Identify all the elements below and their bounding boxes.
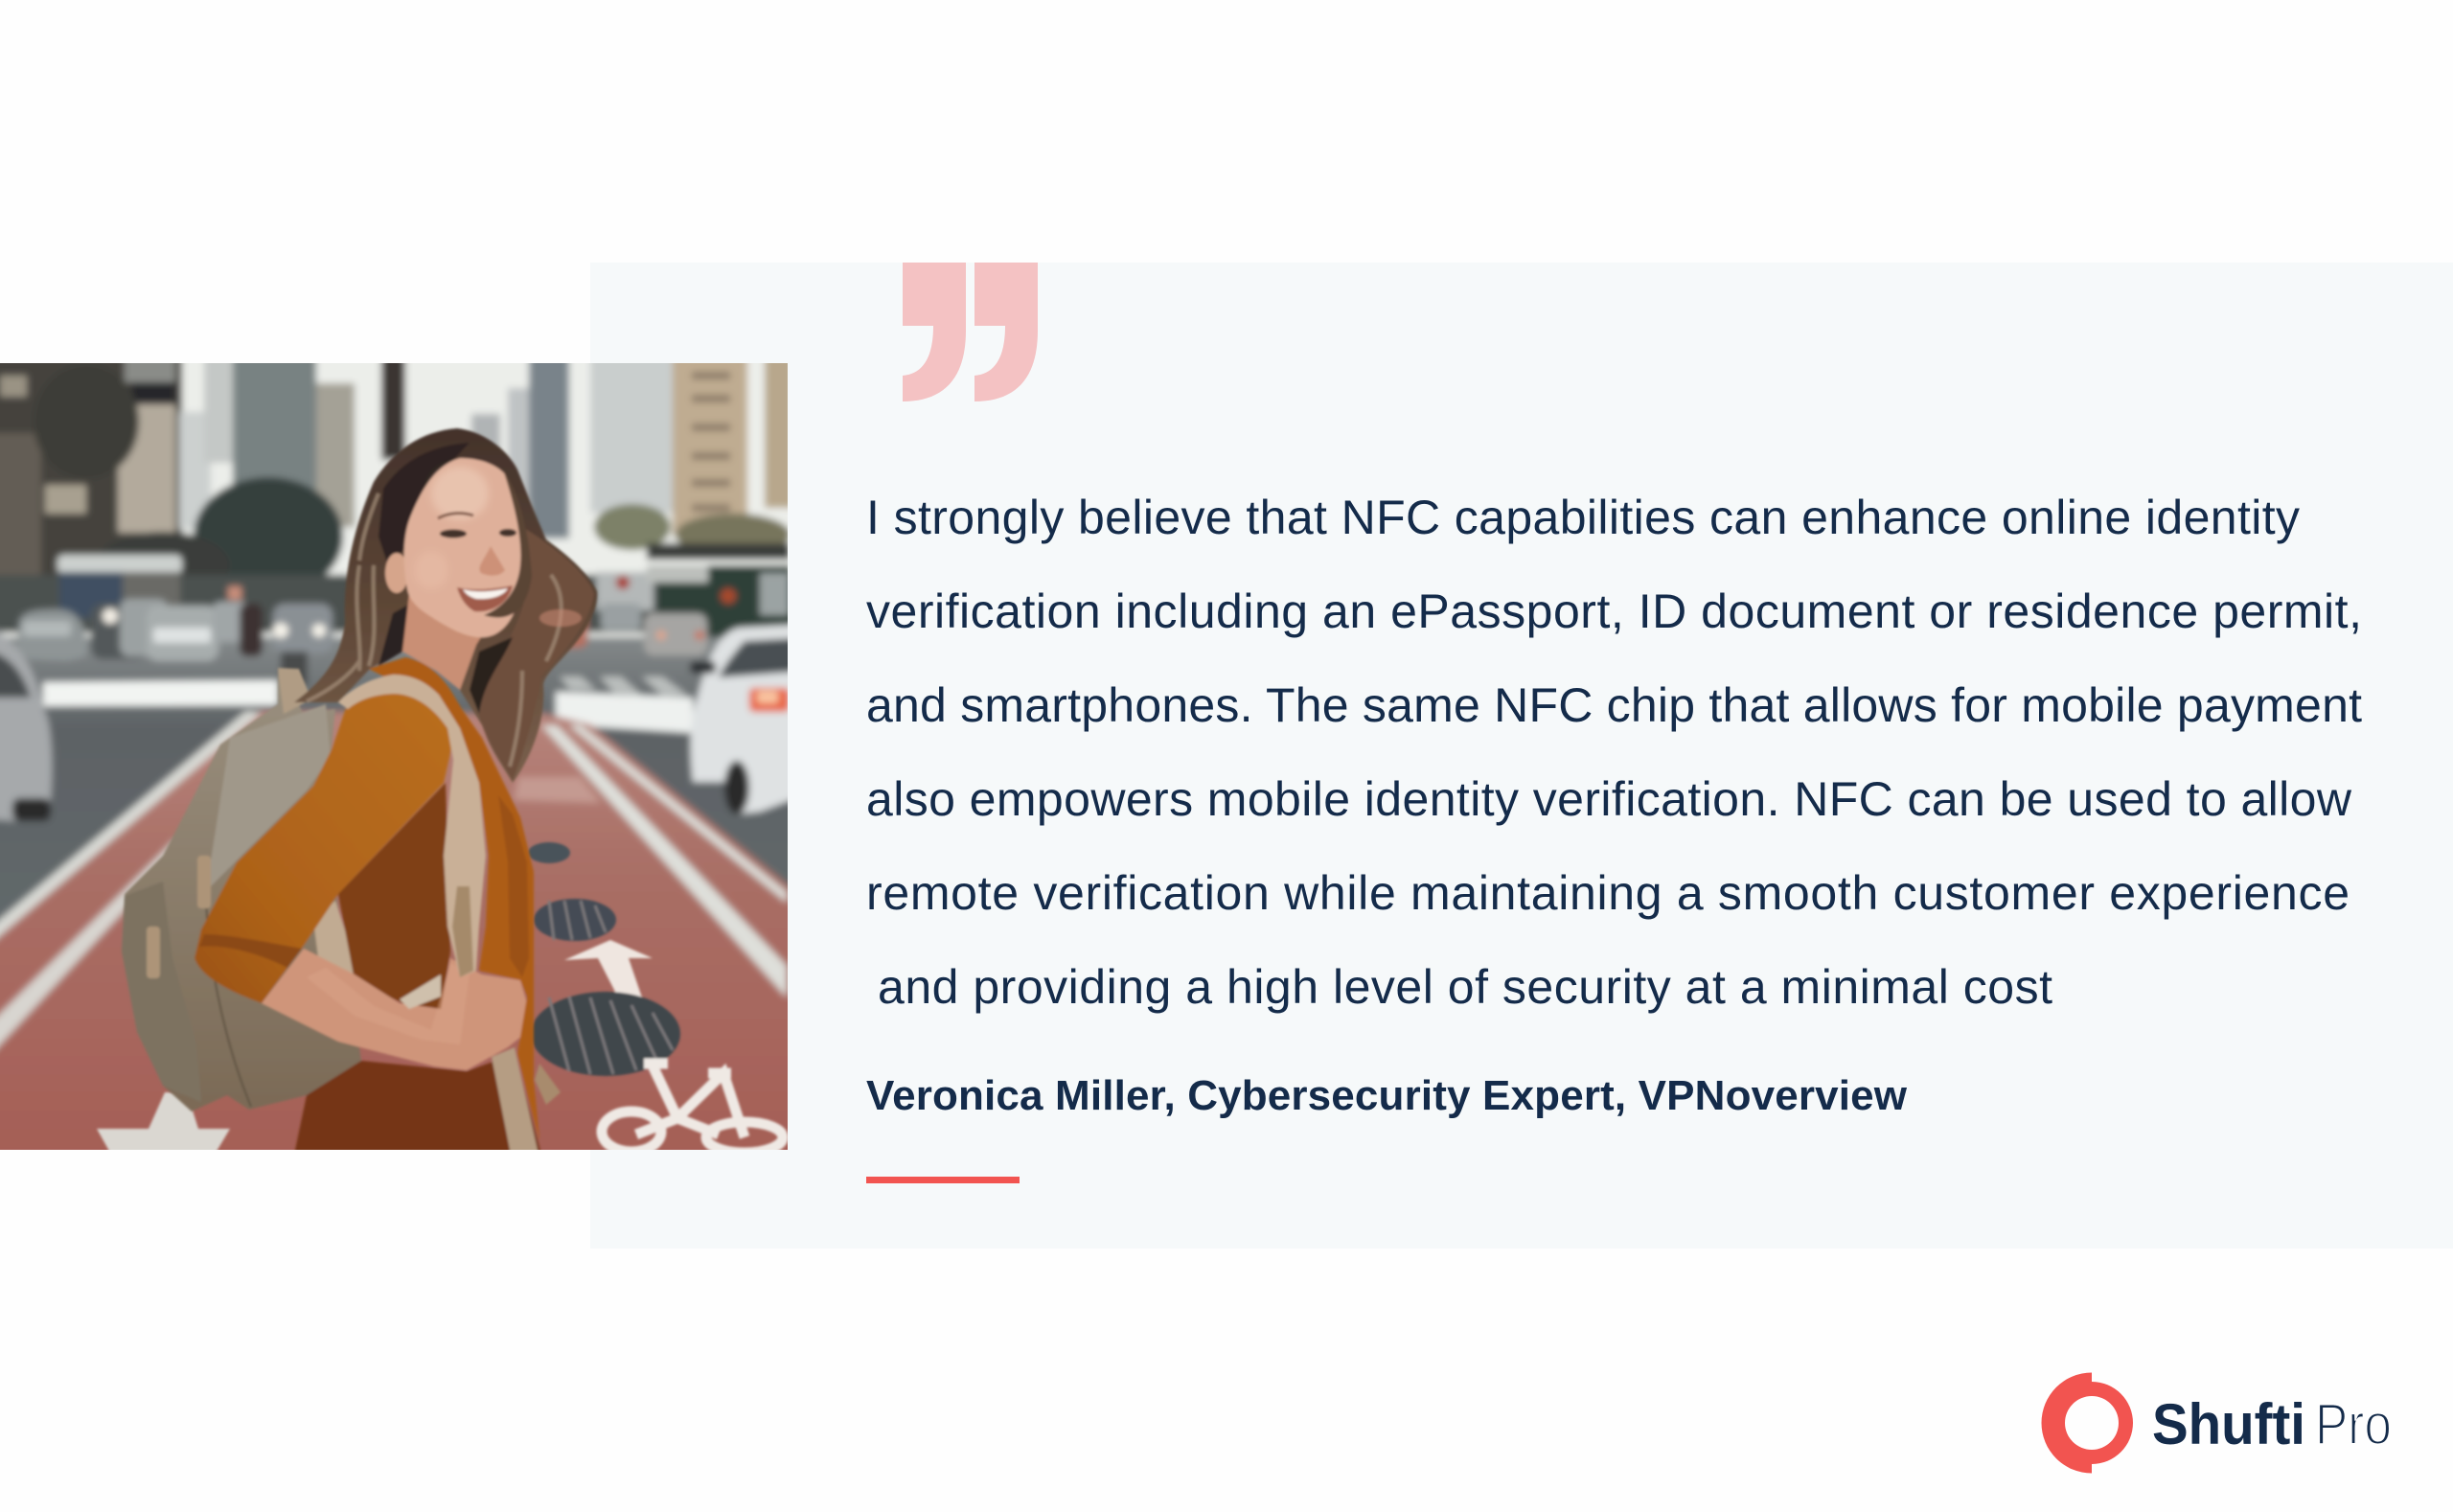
quote text: also empowers mobile identity verification. NFC can be used to allow <box>866 772 2352 826</box>
face <box>404 458 522 637</box>
quote text: and providing a high level of security at a minimal cost <box>878 960 2052 1014</box>
torso <box>338 783 450 1009</box>
woman <box>122 428 597 1155</box>
wordmark: Pro <box>2315 1392 2392 1456</box>
logo: Shufti Pro <box>2041 1372 2392 1474</box>
silver car left <box>0 629 52 821</box>
sleeve <box>195 693 453 1003</box>
trees <box>194 477 343 596</box>
neck <box>402 594 484 690</box>
quote text: and smartphones. The same NFC chip that allows for mobile payment <box>866 678 2362 732</box>
icon: quotation mark <box>903 263 1038 401</box>
right side traffic <box>596 572 653 610</box>
arm and hand <box>262 949 527 1070</box>
street band <box>0 575 795 632</box>
backpack <box>122 668 361 1111</box>
crosswalk <box>43 680 278 706</box>
accent rule <box>866 1177 1020 1183</box>
wordmark <box>2152 1392 2392 1456</box>
bike lane <box>0 711 795 1159</box>
logo mark <box>2042 1372 2133 1474</box>
lower dress <box>294 1054 541 1155</box>
bus <box>57 555 182 574</box>
quote text <box>866 491 2362 1014</box>
shoulder strap <box>338 675 486 977</box>
road <box>0 637 795 944</box>
ear <box>385 553 408 593</box>
hair <box>294 428 597 783</box>
quote text: I strongly believe that NFC capabilities can enhance online identity <box>866 491 2300 544</box>
road markings <box>97 842 783 1155</box>
quote text: verification including an ePassport, ID document or residence permit, <box>866 584 2362 638</box>
cars <box>17 609 86 661</box>
quote attribution: Veronica Miller, Cybersecurity Expert, VPNoverview <box>866 1072 1908 1119</box>
photo: smiling woman with backpack on a city bike lane <box>0 363 788 1150</box>
hair strand over face <box>484 470 532 617</box>
lower strap <box>492 1047 539 1155</box>
quote text: remote verification while maintaining a smooth customer experience <box>866 866 2350 920</box>
left buildings <box>0 355 182 613</box>
scarf <box>369 657 539 1140</box>
cross strap <box>400 974 441 1009</box>
white car right <box>691 625 795 814</box>
blurred city background <box>0 355 795 1159</box>
panel: quote background <box>590 263 2453 1249</box>
wordmark: Shufti <box>2152 1392 2305 1456</box>
eyes, nose and smile <box>440 529 467 538</box>
